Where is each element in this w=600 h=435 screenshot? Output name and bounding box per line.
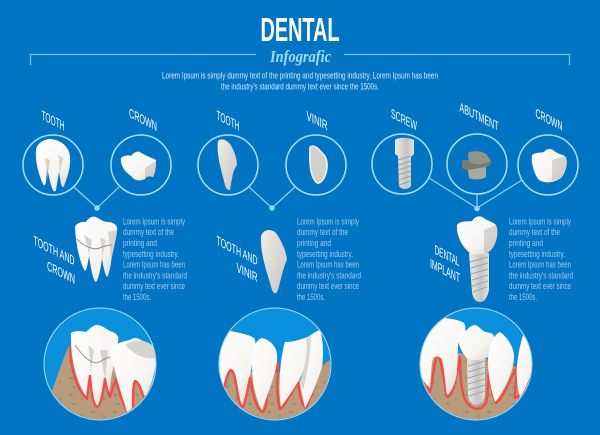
- description text: dummy text of the: [123, 227, 174, 238]
- description text: [297, 216, 361, 303]
- assembled implant: [457, 216, 497, 302]
- label: tooth and vinir: VINIR: [236, 259, 258, 285]
- description text: [509, 216, 573, 303]
- scene: implant in gum: [415, 308, 535, 425]
- connector node: [269, 205, 275, 211]
- intro text: Lorem Ipsum is simply dummy text of the printing and typesetting industry. Lorem Ipsum has been: [162, 70, 438, 82]
- label: abutment: ABUTMENT: [460, 99, 499, 134]
- label: screw: SCREW: [391, 105, 417, 133]
- intro text: [162, 70, 438, 92]
- description text: the 1500s.: [123, 292, 151, 303]
- label: tooth: TOOTH: [217, 107, 239, 134]
- circle: abutment: [447, 134, 507, 194]
- circle: screw: [372, 134, 432, 194]
- description text: printing and: [509, 238, 543, 249]
- description text: typesetting industry.: [297, 249, 353, 260]
- description text: dummy text ever since: [123, 281, 185, 292]
- description text: Lorem Ipsum has been: [123, 260, 185, 270]
- description text: dummy text of the: [509, 227, 560, 238]
- description text: the 1500s.: [509, 292, 537, 303]
- panel: dental implant: [372, 99, 578, 425]
- circle: tooth: [23, 135, 83, 195]
- panel: tooth and crown: [23, 105, 187, 430]
- description text: Lorem Ipsum is simply: [297, 216, 359, 228]
- circle: crown: [518, 135, 578, 195]
- label: crown: CROWN: [535, 105, 563, 134]
- description text: printing and: [297, 238, 331, 249]
- circle: tooth: [198, 135, 258, 195]
- scene: teeth with vinir: [214, 308, 331, 425]
- description text: dummy text ever since: [297, 281, 359, 292]
- description text: printing and: [123, 238, 157, 249]
- title: DENTAL: [260, 11, 340, 48]
- panel: tooth and vinir: [198, 99, 578, 425]
- description text: the industry's standard: [297, 270, 361, 282]
- label: tooth and vinir: [216, 232, 258, 285]
- subtitle: Infografic: [269, 47, 331, 66]
- label: dental implant: [430, 241, 460, 286]
- label: tooth and crown: CROWN: [47, 258, 75, 287]
- intro text: the industry's standard dummy text ever since the 1500s.: [221, 82, 379, 92]
- description text: [123, 216, 187, 303]
- connector node: [94, 205, 100, 211]
- connector lines: [249, 187, 295, 208]
- label: crown: CROWN: [129, 105, 157, 134]
- label: dental implant: DENTAL: [434, 241, 460, 269]
- circle: crown: [111, 135, 171, 195]
- description text: typesetting industry.: [509, 249, 565, 260]
- label: tooth and vinir: TOOTH AND: [216, 232, 258, 268]
- description text: the 1500s.: [297, 292, 325, 303]
- description text: dummy text of the: [297, 227, 348, 238]
- description text: Lorem Ipsum is simply: [123, 216, 185, 228]
- scene: teeth in gum: [44, 308, 156, 420]
- label: tooth: TOOTH: [42, 107, 64, 134]
- assembled tooth: [75, 217, 117, 282]
- label: tooth and crown: TOOTH AND: [34, 232, 75, 268]
- connector lines: [74, 187, 119, 208]
- label: dental implant: IMPLANT: [430, 255, 460, 286]
- description text: typesetting industry.: [123, 249, 179, 260]
- label: vinir: VINIR: [306, 107, 328, 133]
- assembled vinir tooth: [261, 230, 287, 293]
- description text: Lorem Ipsum has been: [297, 260, 359, 270]
- description text: the industry's standard: [123, 270, 187, 282]
- connector lines: [429, 178, 522, 208]
- label: tooth and crown: [34, 232, 75, 287]
- circle: vinir: [286, 135, 346, 195]
- connector node: [474, 206, 480, 211]
- header rule: [30, 54, 570, 65]
